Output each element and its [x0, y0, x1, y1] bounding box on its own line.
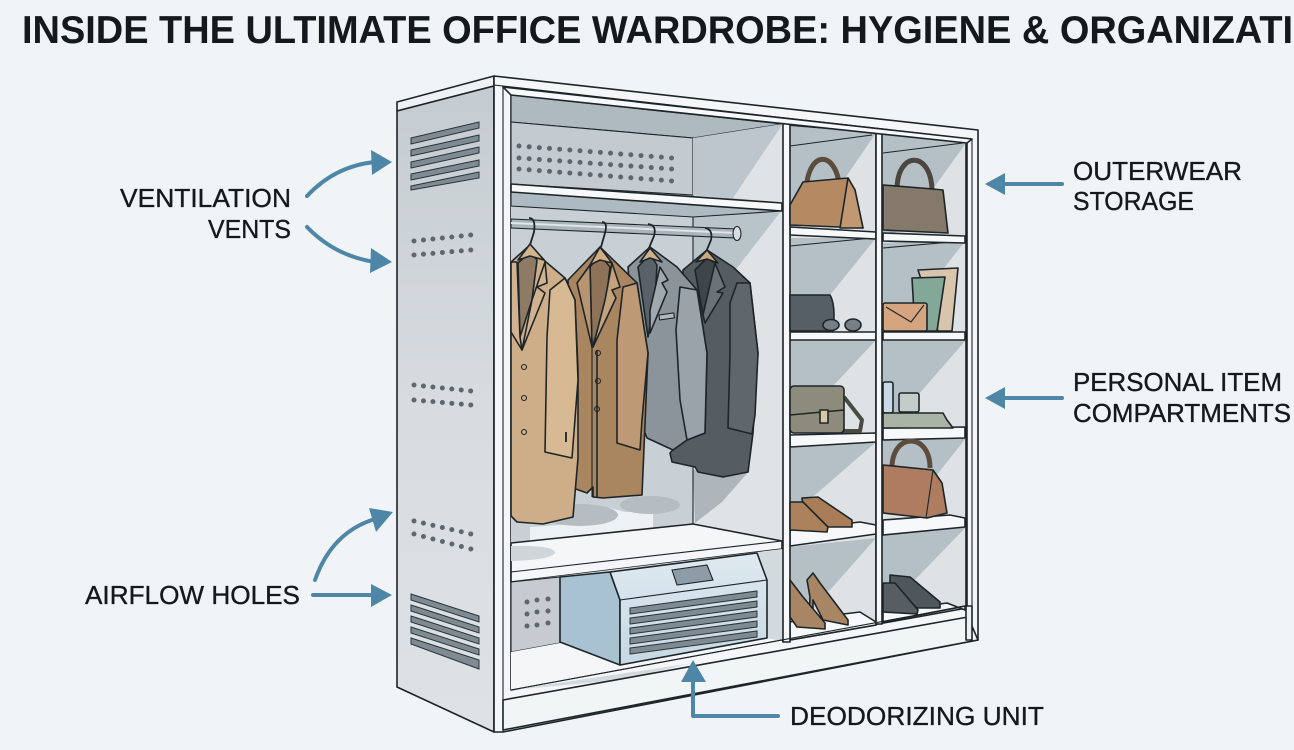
side panel: [397, 76, 494, 732]
cubby shadows: [790, 126, 966, 610]
coat: tan: [511, 244, 578, 524]
tan oxford shoes: [790, 497, 852, 532]
base plinth: [503, 606, 978, 730]
brown handbag: [790, 159, 863, 228]
arrow: deodorizing unit: [681, 660, 778, 716]
side vents top: [411, 122, 479, 190]
side airflow holes: [414, 235, 471, 549]
label: outerwear storage: STORAGE: [1073, 186, 1194, 216]
label: outerwear storage: OUTERWEAR: [1073, 156, 1242, 186]
deodorizing unit: [560, 553, 767, 665]
hanging compartment walls: [511, 192, 782, 543]
side vents bottom: [411, 594, 479, 669]
hanging compartment floor shelf: [511, 524, 782, 582]
taupe handbag: [883, 160, 948, 233]
cosmetics and stacked tray: [883, 382, 953, 428]
label: personal item compartments: [1073, 367, 1291, 428]
coat: brown: [568, 247, 648, 498]
label: ventilation vents: VENTILATION: [120, 183, 291, 213]
arrow: personal item compartments: [985, 387, 1062, 409]
wardrobe illustration: [397, 76, 978, 732]
books and small purse: [883, 268, 958, 331]
coat: dark grey: [670, 250, 758, 477]
label: ventilation vents: VENTS: [208, 214, 291, 244]
arrow: airflow upper: [315, 508, 393, 580]
rust handbag: [883, 441, 947, 518]
arrow: outerwear storage: [985, 173, 1062, 195]
label: airflow holes: AIRFLOW HOLES: [85, 580, 300, 610]
top shelf: [511, 184, 782, 211]
clothes rail: [511, 219, 741, 240]
top band: [503, 87, 972, 143]
frame front: [494, 76, 978, 732]
posts: [783, 122, 790, 642]
olive crossbody bag: [790, 386, 862, 433]
label: personal item compartments: COMPARTMENTS: [1073, 398, 1291, 428]
arrow: airflow lower: [313, 584, 392, 607]
arrow: ventilation lower: [307, 227, 392, 273]
arrow: ventilation upper: [307, 150, 392, 196]
label: deodorizing unit: DEODORIZING UNIT: [790, 701, 1044, 731]
coat: mid grey: [628, 247, 707, 450]
label: personal item compartments: PERSONAL ITEM: [1073, 367, 1282, 397]
label: ventilation vents: [120, 183, 291, 244]
main compartment interior: [511, 95, 967, 690]
cubby shelves: [790, 227, 965, 640]
dark oxford shoes: [883, 575, 940, 614]
black bag and sunglasses: [790, 295, 861, 331]
label: outerwear storage: [1073, 156, 1242, 216]
heels: [790, 573, 848, 629]
upper storage compartment: [511, 95, 782, 203]
right cubbies: [783, 122, 966, 642]
lower compartment: [511, 549, 782, 690]
hangers: [529, 218, 711, 252]
